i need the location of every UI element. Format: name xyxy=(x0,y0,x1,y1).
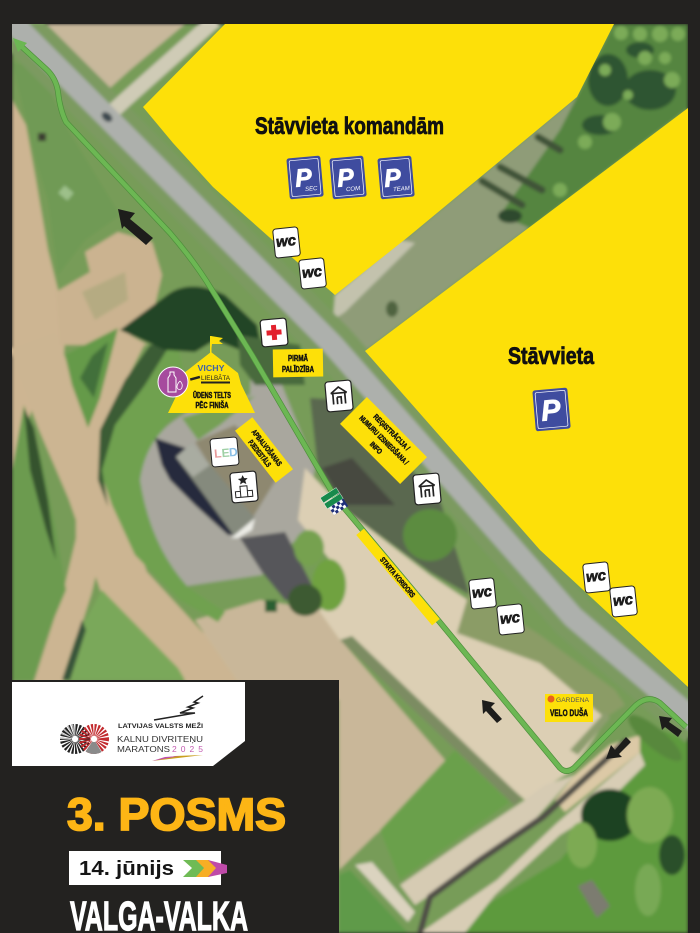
heading: Stāvvieta: Stāvvieta xyxy=(508,343,595,370)
field edge xyxy=(340,636,522,806)
icon: parking TEAM xyxy=(377,156,415,199)
tent body xyxy=(168,352,255,413)
trees along start xyxy=(310,398,470,595)
icon: first aid xyxy=(260,318,288,347)
road verges xyxy=(5,15,700,725)
label: Pirmā palīdzība xyxy=(273,349,323,377)
side road xyxy=(112,20,215,112)
central grass slope xyxy=(100,345,225,622)
upper trees xyxy=(120,286,262,352)
left sand xyxy=(12,100,65,470)
bank xyxy=(355,862,415,922)
finish sign xyxy=(320,488,348,516)
logo panel xyxy=(12,682,245,766)
wedge grass lower xyxy=(62,590,185,680)
icon: wc 1: wc xyxy=(275,232,297,251)
icon: wc 4 xyxy=(497,604,524,635)
icon: wc 5: wc xyxy=(585,567,607,586)
shed xyxy=(578,880,610,918)
icon: parking COM: COM xyxy=(346,186,360,193)
icon: registration tent 1 xyxy=(325,380,353,412)
lawn beside road xyxy=(457,590,625,718)
label: registration: REĢISTRĀCIJA / xyxy=(371,412,412,453)
start sand xyxy=(298,468,608,800)
route line xyxy=(22,47,686,771)
label: registration xyxy=(340,397,427,484)
bottom lawn xyxy=(467,731,688,933)
icon: parking COM: P xyxy=(336,164,355,193)
label: registration: INFO xyxy=(368,440,384,456)
parking area: teams xyxy=(143,24,614,295)
tent pole xyxy=(210,336,212,354)
logo panel: MARATONS xyxy=(117,744,170,754)
icon: parking SEC: P xyxy=(294,163,313,193)
icon: parking TEAM: TEAM xyxy=(393,186,410,193)
building shadow xyxy=(155,438,240,535)
tent flag xyxy=(211,336,223,352)
green field xyxy=(380,750,510,880)
direction arrow 3 xyxy=(606,737,631,759)
icon: general parking xyxy=(532,388,571,431)
icon: wc 3: wc xyxy=(471,583,493,602)
logo wheels xyxy=(66,727,106,751)
dirt paths xyxy=(32,338,250,700)
water tent: ŪDENS TELTS xyxy=(193,391,231,400)
water tent xyxy=(168,336,255,413)
icon: registration tent 2 xyxy=(413,473,441,505)
parking lot xyxy=(138,378,316,588)
label: awards podium: PJEDESTĀLS xyxy=(246,438,273,469)
logo panel: 2025 xyxy=(172,744,203,754)
grass triangle xyxy=(65,328,118,428)
date box xyxy=(69,851,227,885)
title panel background xyxy=(0,680,339,933)
logo tree xyxy=(154,696,203,720)
heading: Stāvvieta komandām: Stāvvieta komandām xyxy=(255,113,444,140)
grass left of road xyxy=(12,62,120,275)
road xyxy=(5,15,700,725)
logo panel: KALNU DIVRITEŅU xyxy=(117,734,203,744)
water tent: PĒC FINIŠA xyxy=(196,401,229,410)
water tent: VICHY xyxy=(198,363,225,373)
icon: wc 1 xyxy=(273,227,300,258)
icon: wc 6 xyxy=(610,586,637,617)
route arrowhead xyxy=(13,38,27,52)
label: start corridor: STARTA KORIDORS xyxy=(378,555,417,599)
icon: LED screen xyxy=(210,437,239,467)
curved dirt xyxy=(56,232,162,345)
label: Gardena velo duša: VELO DUŠA xyxy=(550,707,588,719)
icon: parking SEC xyxy=(286,156,324,199)
label: start corridor xyxy=(356,529,440,625)
building xyxy=(178,462,254,536)
date box: 14. jūnijs xyxy=(79,858,174,880)
parking area: general xyxy=(365,108,688,687)
direction arrow 1 xyxy=(118,209,153,245)
icon: wc 3 xyxy=(469,578,496,609)
icon: LED screen: D xyxy=(228,445,239,460)
tree canopy xyxy=(582,42,676,135)
icon: LED screen: E xyxy=(221,446,230,460)
icon: wc 2: wc xyxy=(301,263,323,282)
icon: wc 4: wc xyxy=(499,609,521,628)
bottom sand xyxy=(195,600,445,870)
icon: LED screen: L xyxy=(214,446,222,461)
tree shadow by building xyxy=(240,532,316,605)
label: Pirmā palīdzība: PIRMĀ xyxy=(288,354,308,363)
creek xyxy=(420,740,627,933)
mid strip between parking areas xyxy=(338,98,576,349)
top-left field xyxy=(37,24,185,88)
trees bottom right xyxy=(581,789,639,841)
label: awards podium: APBALVOŠANAS xyxy=(250,428,284,468)
icon: water bottle xyxy=(158,367,188,397)
icon: parking SEC: SEC xyxy=(305,186,318,193)
left meadow xyxy=(12,405,66,680)
dark tree rows xyxy=(482,137,560,205)
direction arrow 2 xyxy=(482,700,502,723)
label: Gardena velo duša: GARDENA xyxy=(556,697,590,704)
icon: wc 6: wc xyxy=(612,591,634,610)
car xyxy=(100,110,114,124)
direction arrow 4 xyxy=(659,716,682,737)
water tent: LIELBĀTA xyxy=(201,375,230,382)
icon: parking TEAM: P xyxy=(383,164,402,193)
icon: wc 5 xyxy=(583,562,610,593)
label: registration: NUMURU IZSNIEGŠANA / xyxy=(357,414,411,467)
label: Gardena velo duša xyxy=(545,694,593,722)
icon: general parking: P xyxy=(540,394,563,428)
label: awards podium xyxy=(235,417,293,483)
icon: parking COM xyxy=(329,156,367,199)
lower sand xyxy=(400,775,575,905)
icon: wc 2 xyxy=(299,258,326,289)
logo panel: LATVIJAS VALSTS MEŽI xyxy=(118,721,203,730)
right trees backdrop xyxy=(500,24,688,228)
building grounds xyxy=(194,424,276,516)
title: 3. Posms: 3. POSMS xyxy=(67,789,286,840)
icon: podium xyxy=(230,471,258,503)
small green box xyxy=(58,185,74,201)
label: Pirmā palīdzība: PALĪDZĪBA xyxy=(282,365,314,374)
